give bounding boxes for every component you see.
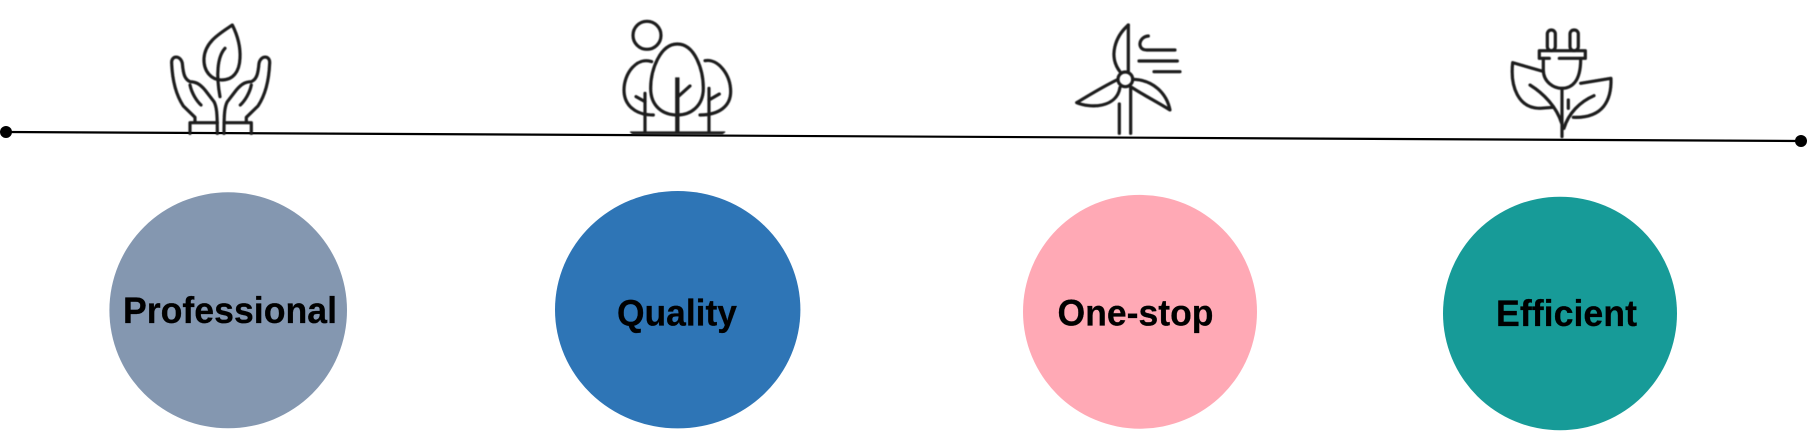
- icon: hands holding leaf: [172, 25, 270, 133]
- icon: wind turbine: [1077, 25, 1180, 133]
- circle: Efficient: Efficient: [1496, 293, 1637, 334]
- circle: Professional: Professional: [123, 290, 337, 331]
- circle: Professional: [109, 192, 347, 428]
- icon: trees and sun: [624, 21, 731, 134]
- timeline line with end dots: [0, 126, 1807, 147]
- circle: Efficient: [1443, 197, 1677, 430]
- circle: Quality: Quality: [617, 293, 738, 334]
- circle: Quality: [555, 191, 800, 428]
- circle: One-stop: One-stop: [1058, 293, 1214, 334]
- circle: One-stop: [1023, 195, 1257, 429]
- icon: plug plant: [1512, 30, 1611, 137]
